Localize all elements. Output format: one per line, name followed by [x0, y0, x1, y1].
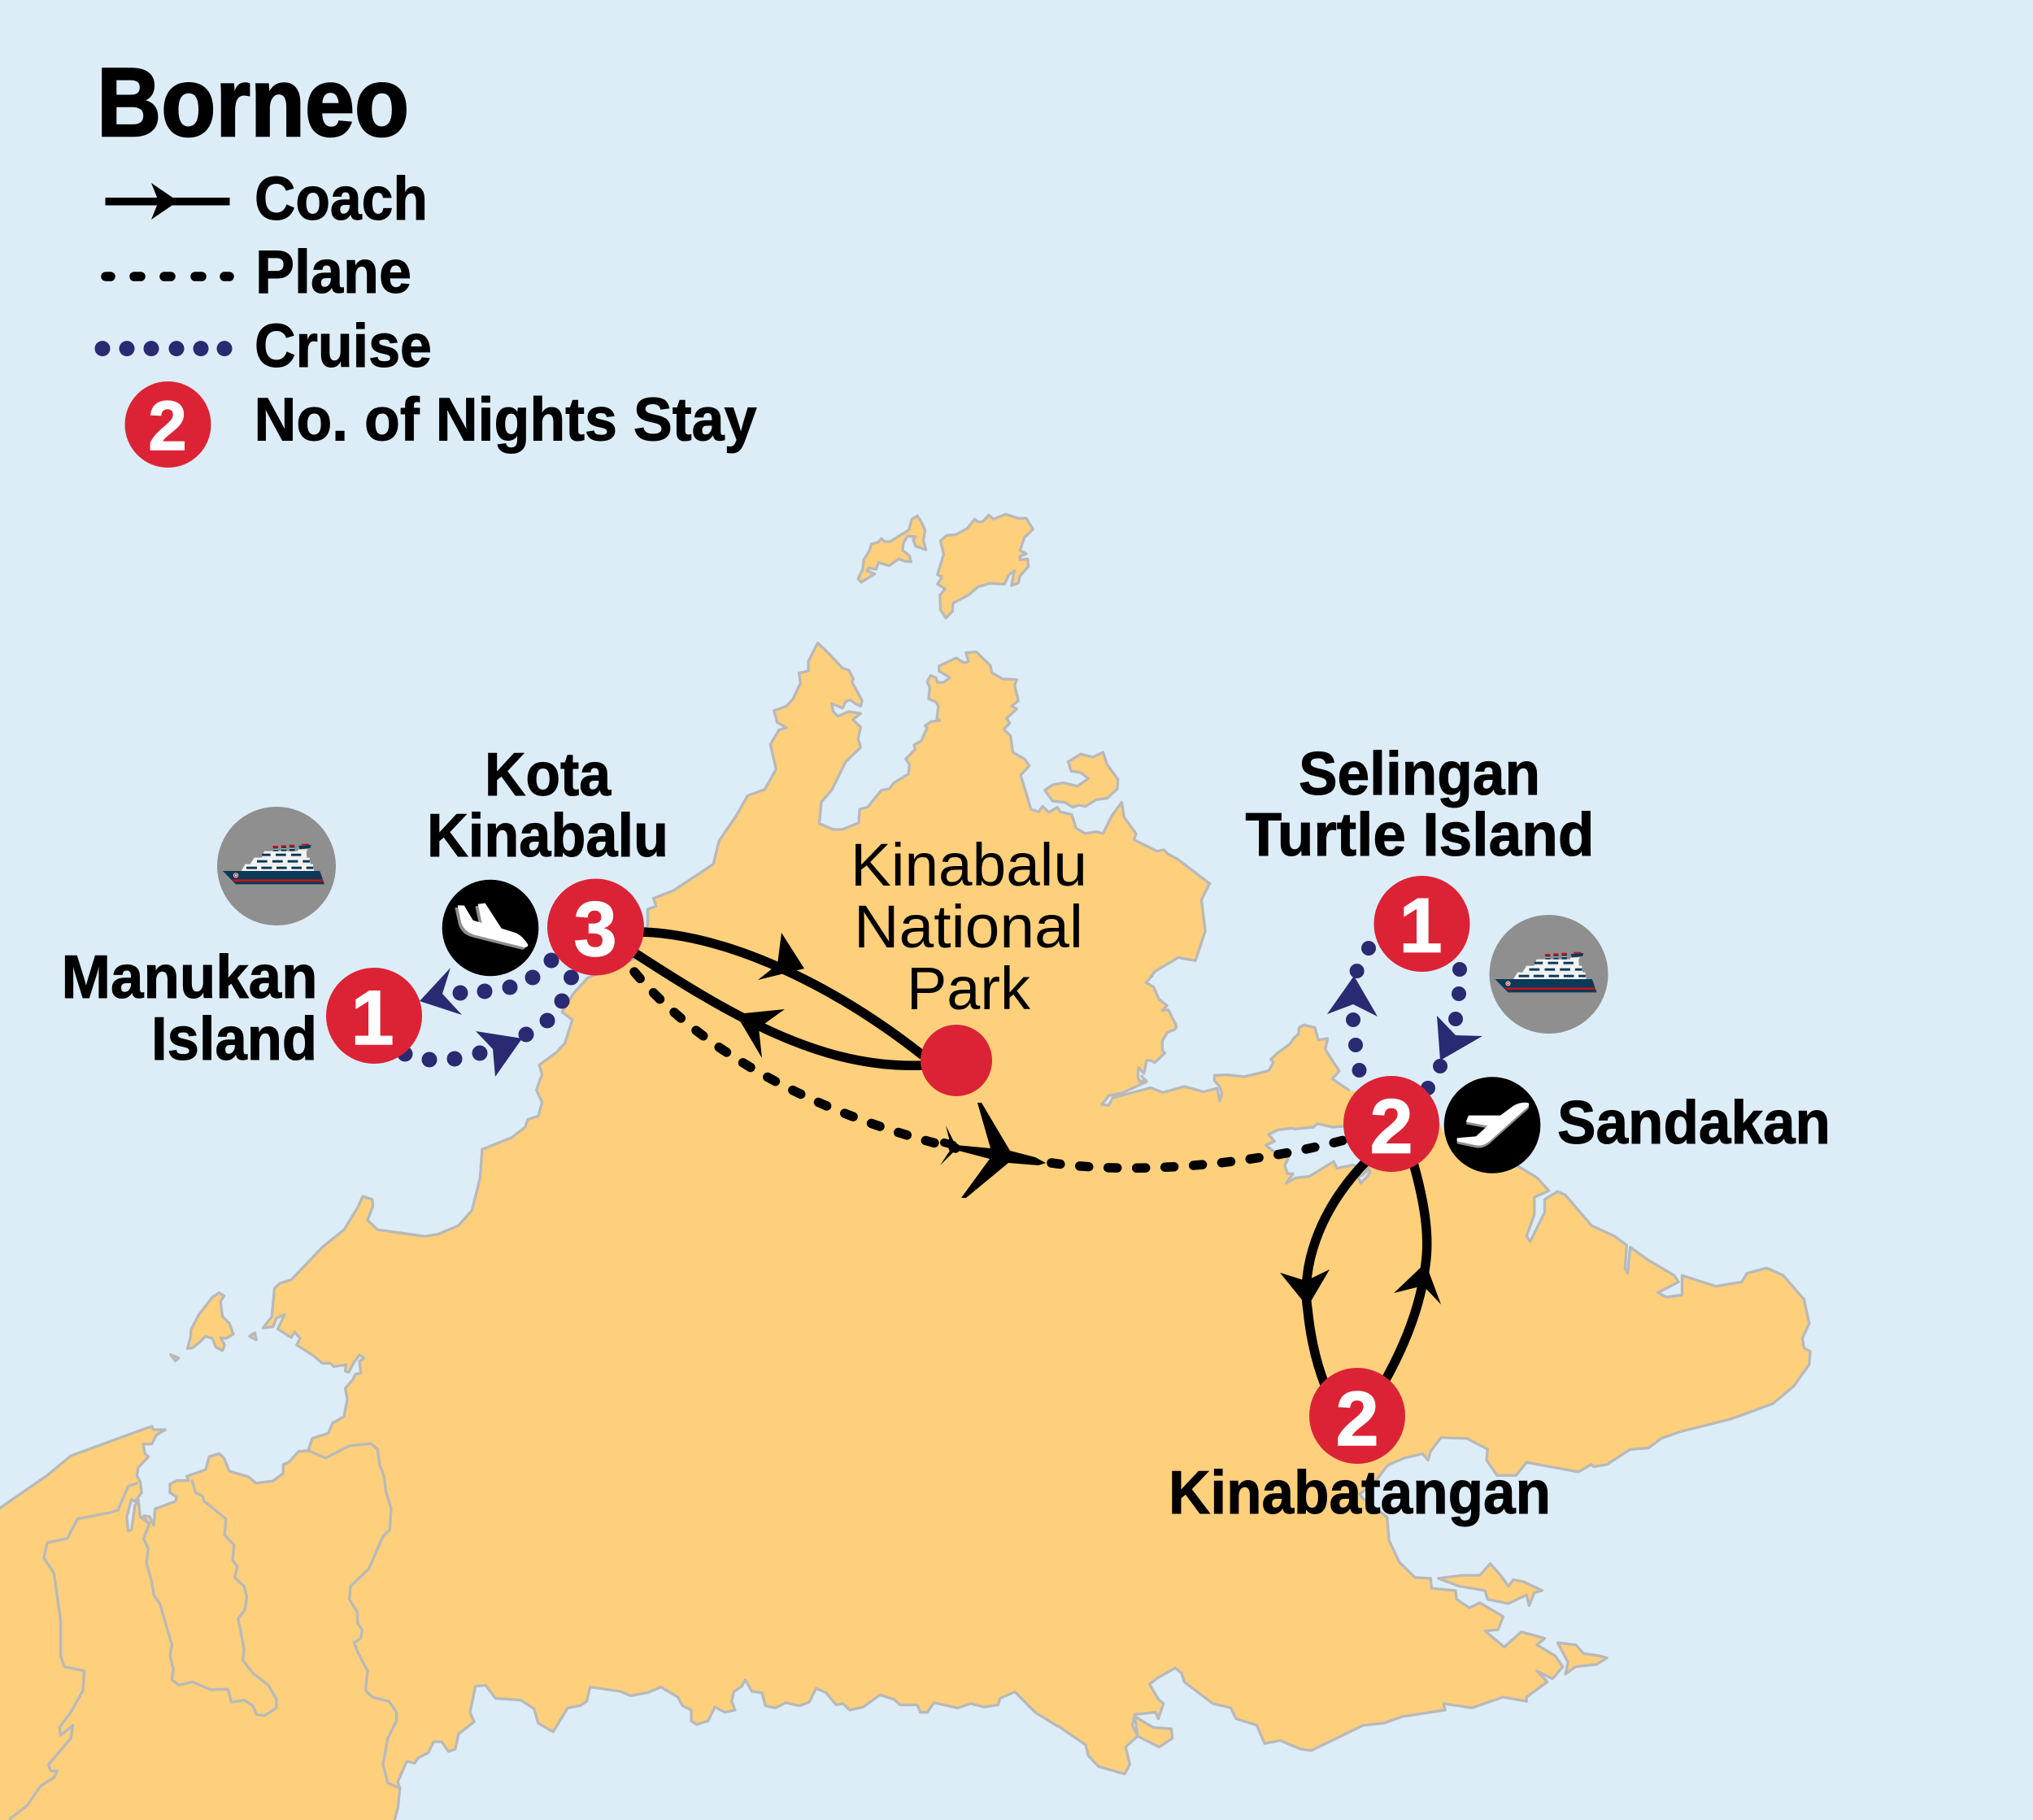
route: coach Kota Kinabalu to Kinabalu National Park [642, 932, 923, 1056]
legend: plane line [106, 272, 229, 281]
label: Kota Kinabalu: Kota [485, 740, 612, 808]
legend: cruise label: Cruise [255, 311, 432, 380]
marker: Selingan Turtle Island, 1 night: 1 [1400, 883, 1442, 969]
marker: Selingan Turtle Island, 1 night [1374, 876, 1470, 972]
route: cruise Kota Kinabalu to Manukan Island [420, 953, 559, 1015]
route: cruise Manukan Island to Kota Kinabalu [397, 969, 579, 1077]
icon: airport at Kota Kinabalu [442, 880, 538, 976]
map: Sandakan bay water [1266, 1124, 1377, 1183]
label: Kinabalu National Park [851, 831, 1087, 1022]
label: Manukan Island: Island [151, 1004, 317, 1073]
label: Selingan Turtle Island: Turtle Island [1246, 800, 1594, 869]
label: Selingan Turtle Island [1246, 739, 1594, 869]
icon: airport at Sandakan [1444, 1077, 1540, 1173]
icon: cruise ship near Selingan Turtle Island [1490, 915, 1609, 1034]
icon: plane silhouette on flight route [940, 1103, 1046, 1198]
route: coach Kinabatangan to Sandakan [1384, 1163, 1441, 1382]
route: flight Kota Kinabalu to Sandakan [634, 972, 1350, 1198]
legend: nights marker [125, 381, 211, 468]
legend: nights marker: 2 [148, 388, 187, 465]
legend: plane label: Plane [255, 237, 411, 306]
marker: Kinabatangan, 2 nights: 2 [1336, 1376, 1378, 1462]
marker: Kota Kinabalu, 3 nights [547, 878, 644, 976]
marker: Kota Kinabalu, 3 nights: 3 [574, 886, 616, 973]
route: coach Kinabalu National Park to Kota Kinabalu [626, 947, 923, 1065]
legend: nights label: No. of Nights Stay [254, 385, 757, 454]
map: land of northern Borneo [0, 514, 1810, 1820]
map: coastlines and borders [0, 514, 1810, 1820]
label: Manukan Island [62, 943, 317, 1073]
marker: Kinabalu National Park [921, 1025, 992, 1096]
label: Kinabalu National Park: Park [907, 955, 1031, 1022]
label: Sandakan: Sandakan [1557, 1088, 1831, 1156]
marker: Sandakan, 2 nights: 2 [1370, 1083, 1413, 1169]
label: Kota Kinabalu: Kinabalu [427, 801, 668, 869]
label: Manukan Island: Manukan [62, 943, 317, 1011]
legend: cruise dots [94, 341, 233, 356]
label: Kinabatangan: Kinabatangan [1169, 1458, 1551, 1526]
marker: Kinabatangan, 2 nights [1309, 1368, 1405, 1464]
label: Kinabalu National Park: National [854, 893, 1083, 960]
label: Kota Kinabalu [427, 740, 668, 869]
label: Selingan Turtle Island: Selingan [1299, 739, 1540, 808]
title: Borneo [97, 48, 409, 157]
route: cruise Selingan Turtle Island to Sandakan [1421, 962, 1482, 1095]
route: coach Sandakan to Kinabatangan [1280, 1161, 1366, 1387]
marker: Manukan Island, 1 night: 1 [351, 975, 394, 1061]
label: Kinabalu National Park: Kinabalu [851, 831, 1087, 899]
legend [94, 164, 757, 468]
legend: coach line [106, 183, 229, 220]
route: cruise Sandakan to Selingan Turtle Island [1327, 941, 1378, 1078]
marker: Sandakan, 2 nights [1343, 1076, 1439, 1172]
marker: Manukan Island, 1 night [326, 968, 422, 1064]
icon: cruise ship near Manukan Island [217, 807, 336, 925]
legend: coach label: Coach [255, 164, 428, 233]
